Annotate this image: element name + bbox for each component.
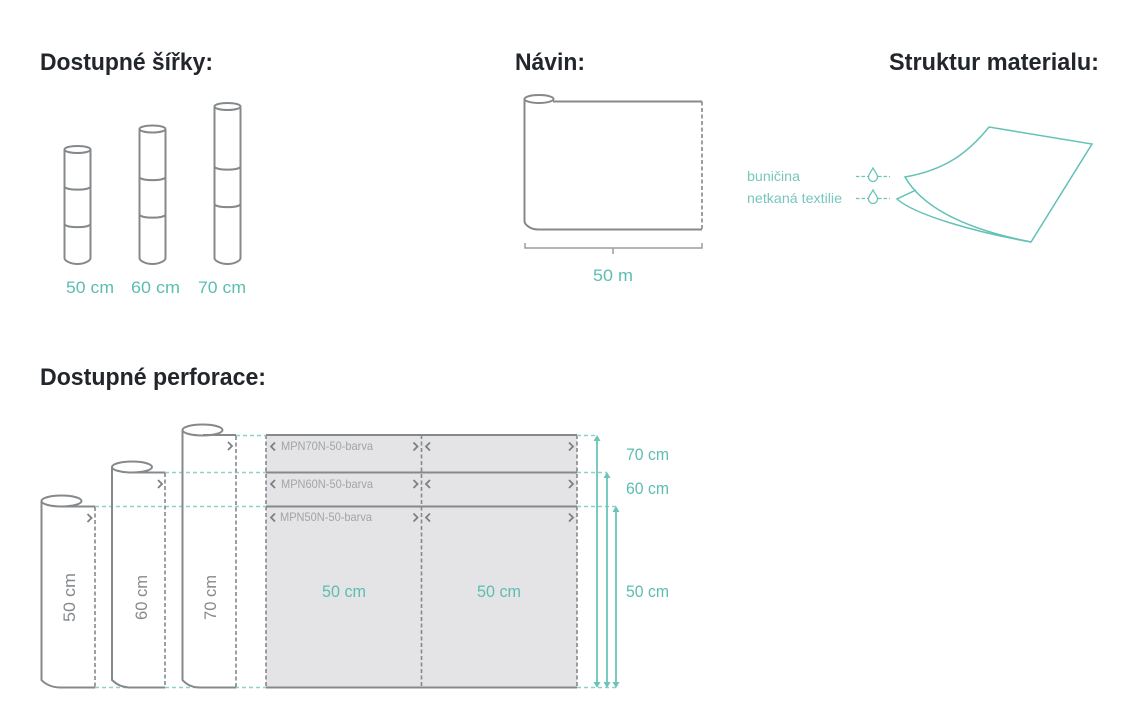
- label: 70 cm height: 70 cm: [626, 445, 669, 464]
- lower nonwoven layer: [897, 190, 1031, 242]
- icon: nonwoven drop connector: [856, 190, 890, 204]
- heading: available perforations: Dostupné perforace:: [40, 364, 266, 391]
- label: left 50 cm: 50 cm: [322, 582, 366, 601]
- label: 50 cm height: 50 cm: [626, 582, 669, 601]
- row: MPN60N-50-barva: [271, 477, 573, 491]
- roll: 50 cm: [42, 496, 95, 688]
- label: 70 cm: 70 cm: [198, 278, 246, 297]
- arrow: 60 cm: [604, 472, 610, 688]
- row: MPN60N-50-barva: MPN60N-50-barva: [281, 477, 373, 491]
- row: MPN70N-50-barva: [271, 439, 573, 453]
- roll: 60 cm: [112, 462, 165, 688]
- icon: 70 cm roll: [214, 103, 240, 264]
- icon: pulp drop connector: [856, 168, 890, 182]
- row: MPN70N-50-barva: MPN70N-50-barva: [281, 439, 373, 453]
- label: nonwoven: netkaná textilie: [747, 190, 842, 206]
- length bracket: [525, 243, 702, 254]
- icon: 60 cm roll: [140, 126, 166, 264]
- label: 50 cm: 50 cm: [66, 278, 114, 297]
- label: pulp: buničina: [747, 168, 800, 184]
- roll: 70 cm: [182, 424, 236, 688]
- upper pulp layer: [905, 127, 1092, 242]
- label: 50 m: 50 m: [593, 266, 633, 285]
- teal guide lines: [95, 436, 619, 688]
- arrow: 70 cm: [594, 435, 600, 688]
- roll length diagram: [524, 95, 702, 285]
- heading: roll length: Návin:: [515, 49, 585, 76]
- row: MPN50N-50-barva: [271, 510, 573, 524]
- roll: 50 cm: 50 cm: [60, 573, 79, 622]
- material structure diagram: [747, 127, 1092, 242]
- icon: 50 cm roll: [64, 146, 90, 264]
- perforated sheet: [266, 435, 577, 688]
- row: MPN50N-50-barva: MPN50N-50-barva: [280, 510, 372, 524]
- label: 60 cm: 60 cm: [131, 278, 180, 297]
- roll: 60 cm: 60 cm: [132, 575, 151, 620]
- label: right 50 cm: 50 cm: [477, 582, 521, 601]
- roll widths group: [64, 103, 246, 297]
- heading: material structure: Struktur materialu:: [889, 49, 1099, 76]
- roll: 70 cm: 70 cm: [201, 575, 220, 620]
- label: 60 cm height: 60 cm: [626, 479, 669, 498]
- arrow: 50 cm: [612, 506, 620, 688]
- heading: available widths: Dostupné šířky:: [40, 49, 213, 76]
- icon: unrolled sheet: [524, 95, 702, 230]
- perforation diagram: [42, 424, 669, 688]
